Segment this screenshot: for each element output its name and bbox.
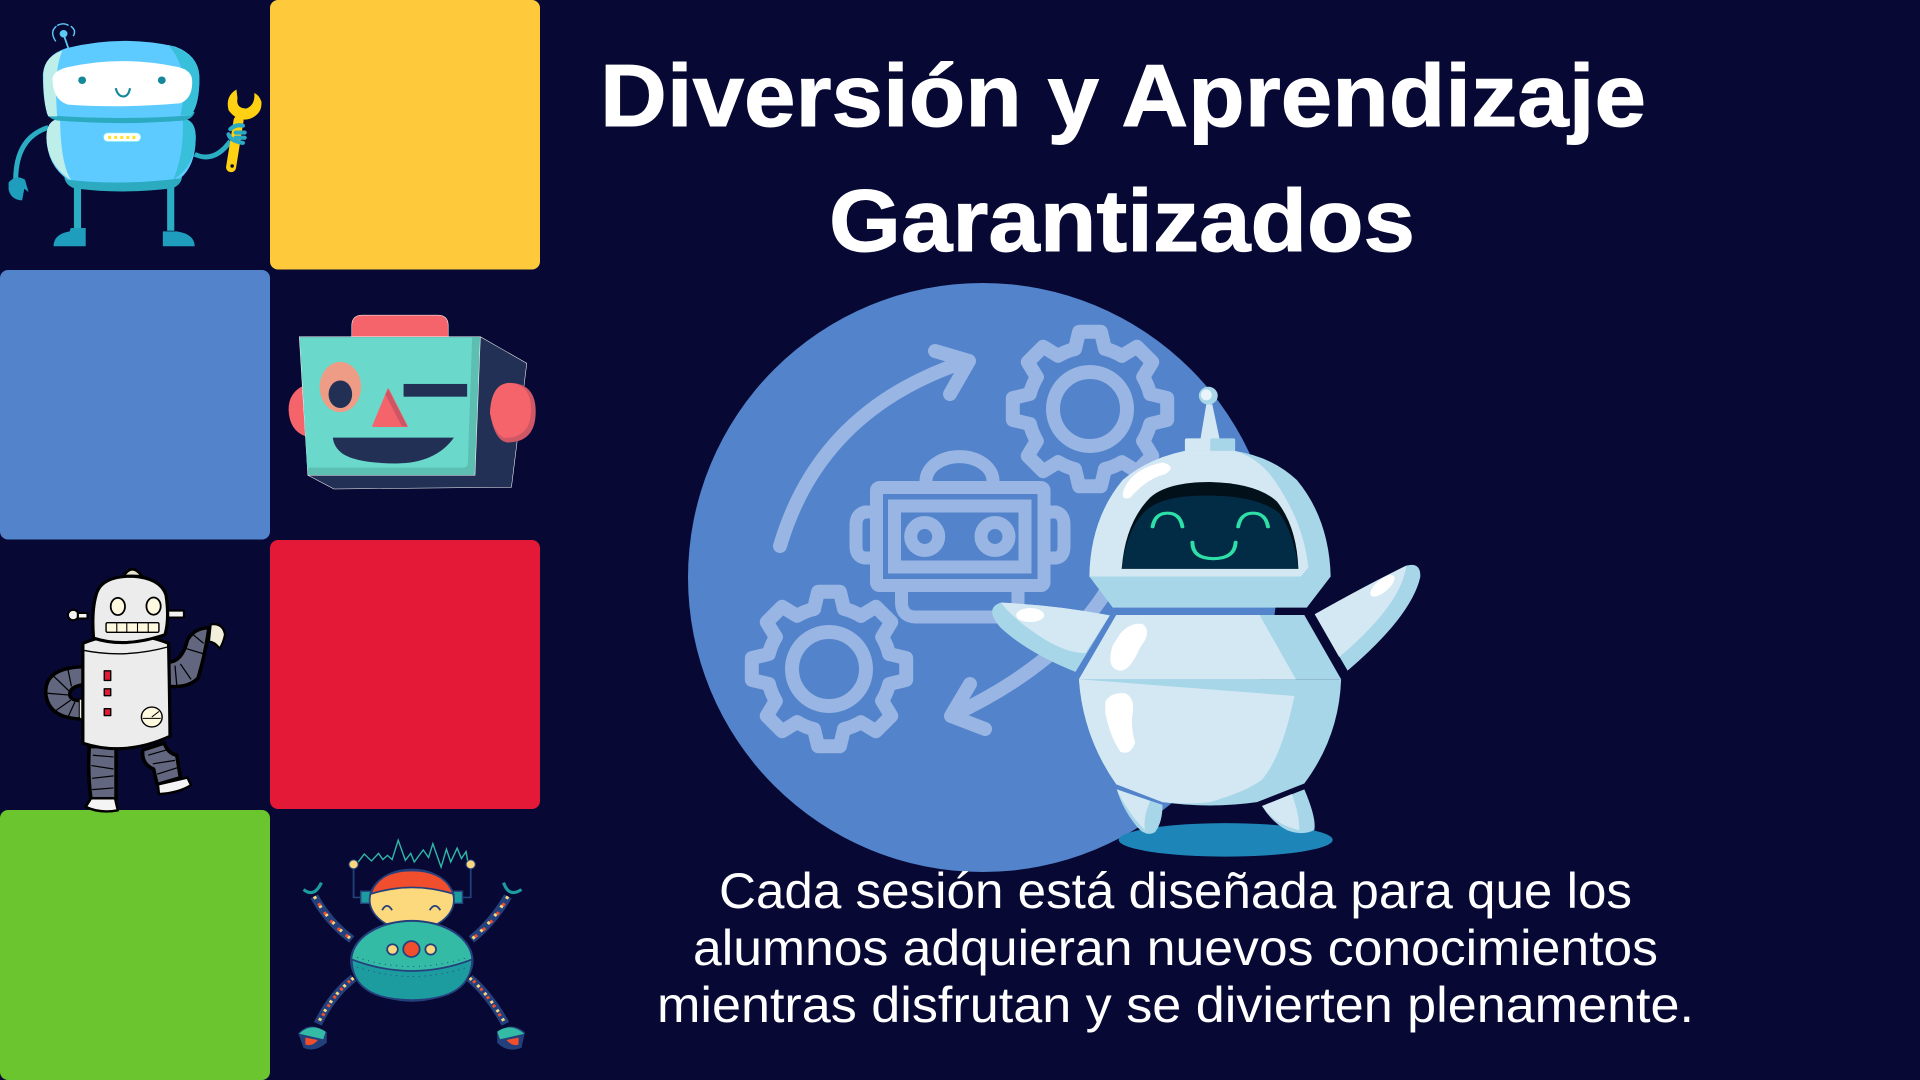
wires and spark xyxy=(354,865,471,897)
face xyxy=(1153,513,1268,559)
limbs xyxy=(314,896,508,1024)
icon: lower gear xyxy=(752,592,906,746)
head xyxy=(123,569,142,576)
icon: blue robot with wrench xyxy=(9,24,262,246)
face xyxy=(299,337,480,475)
ears xyxy=(289,386,305,436)
feet xyxy=(1117,789,1163,834)
arrow: downward curved arrow xyxy=(951,590,1107,729)
panel: blue square xyxy=(0,270,270,540)
right arm xyxy=(168,628,209,687)
head xyxy=(46,112,195,123)
panel: yellow square xyxy=(270,0,540,270)
torso xyxy=(1079,679,1341,805)
text block: description: alumnos adquieran nuevos conocimientos xyxy=(693,920,1658,976)
left arm xyxy=(992,603,1110,672)
text block: description: mientras disfrutan y se divierten plenamente. xyxy=(657,977,1694,1033)
title: Diversión y Aprendizaje xyxy=(600,46,1646,145)
text block: description xyxy=(657,863,1694,1033)
title: Garantizados xyxy=(829,171,1415,270)
icon: teal spider robot xyxy=(298,840,525,1050)
body xyxy=(64,177,182,191)
body xyxy=(351,921,472,1001)
shadow xyxy=(1119,823,1333,857)
icon: teal winking robot head xyxy=(289,315,536,489)
icon: faded robot head xyxy=(856,457,1064,617)
head xyxy=(361,891,462,903)
right arm xyxy=(1315,565,1420,671)
legs xyxy=(89,747,116,800)
icon: white hand-drawn robot xyxy=(46,569,225,811)
illustration: smiling white robot xyxy=(992,387,1420,857)
head xyxy=(1089,577,1331,608)
arrow: upward curved arrow xyxy=(780,351,969,546)
right arm xyxy=(195,141,230,157)
title xyxy=(600,46,1646,270)
text block: description: Cada sesión está diseñada para que los xyxy=(719,863,1632,919)
panel: green square xyxy=(0,810,270,1080)
feet xyxy=(298,1027,327,1050)
body xyxy=(83,635,170,749)
left arm xyxy=(46,667,84,719)
panel: red square xyxy=(270,540,540,809)
legs xyxy=(74,186,174,231)
screen xyxy=(1122,482,1298,569)
icon: upper gear xyxy=(1013,332,1167,486)
wrench xyxy=(231,121,239,167)
left arm xyxy=(16,127,48,179)
illustration: blue circle xyxy=(688,283,1277,872)
antenna xyxy=(1200,404,1220,440)
